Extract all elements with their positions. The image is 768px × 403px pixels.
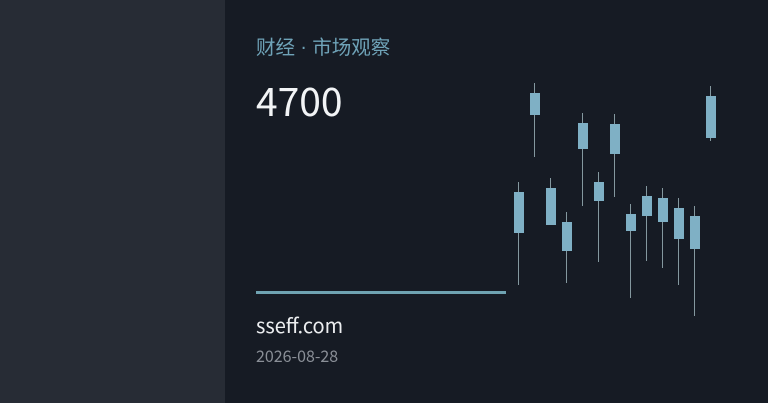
accent rule	[256, 291, 506, 294]
text: site name: sseff.com	[256, 310, 343, 339]
title: index value: 4700	[256, 72, 343, 128]
heading: category label: 财经 · 市场观察	[256, 31, 390, 60]
text: date: 2026-08-28	[256, 343, 338, 367]
panel: left sidebar	[0, 0, 225, 403]
